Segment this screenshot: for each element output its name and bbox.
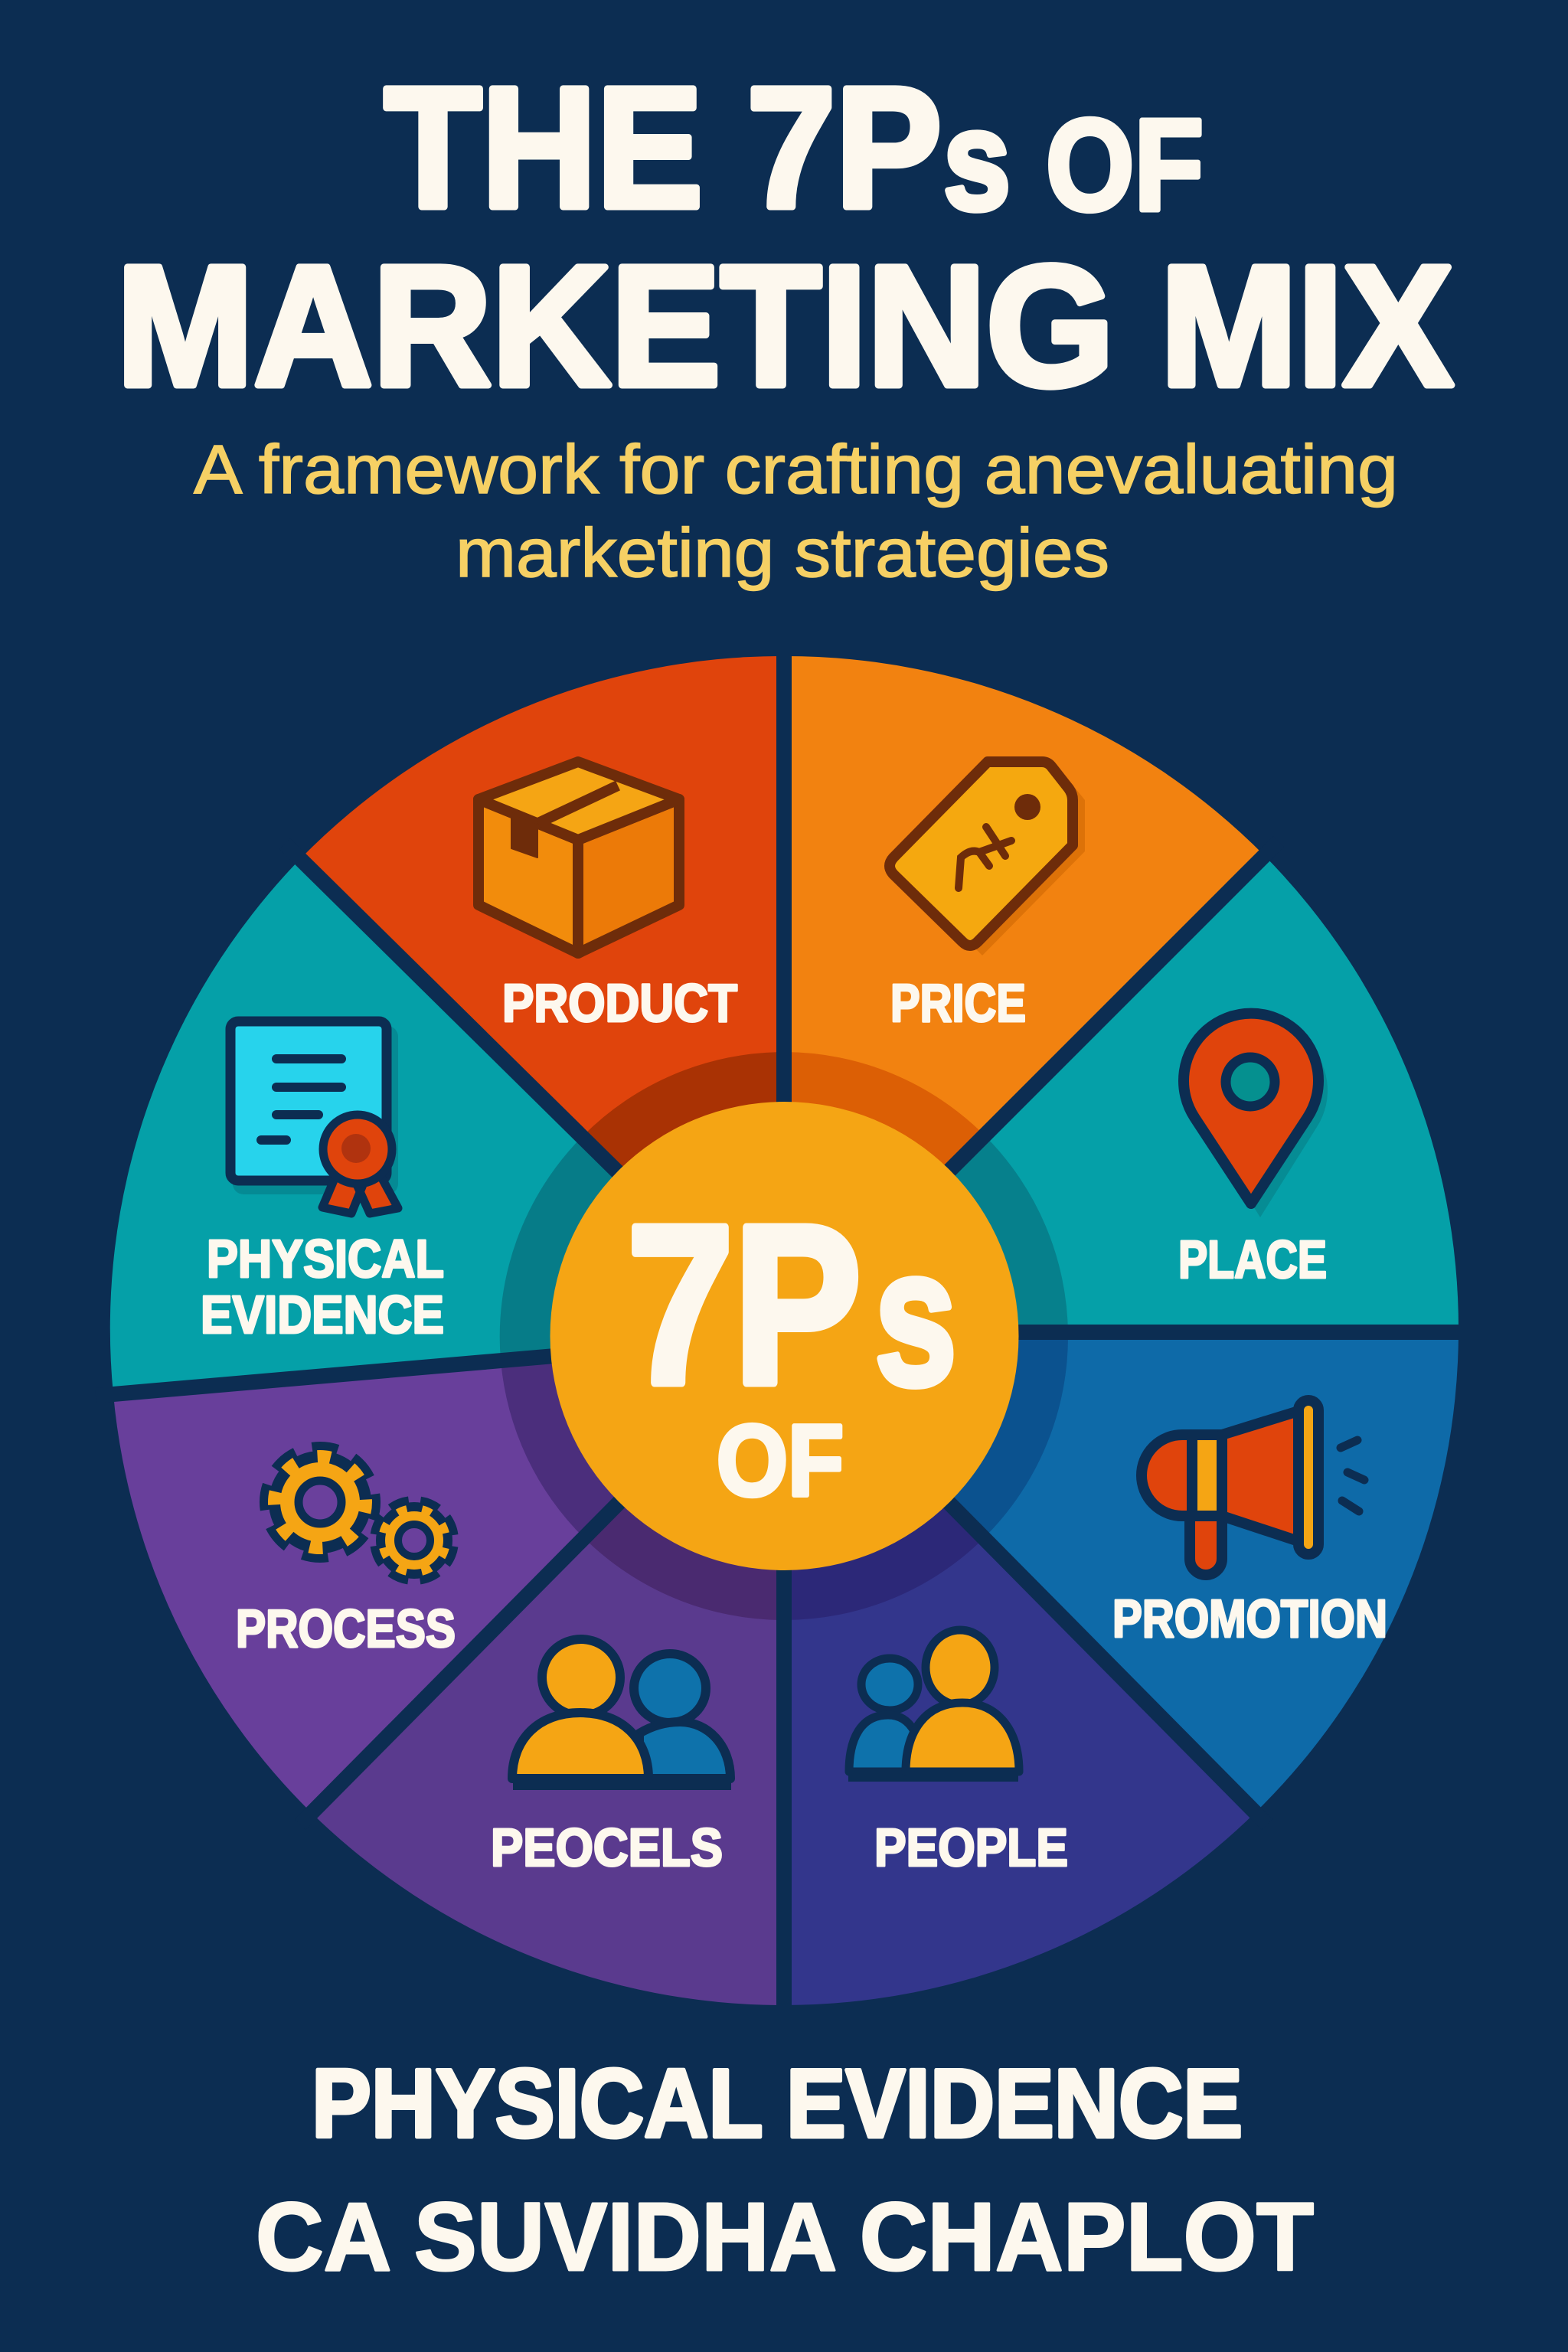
panel: physical evidence xyxy=(110,859,784,1394)
icon: gears xyxy=(264,1446,457,1583)
icon: certificate xyxy=(230,1021,398,1214)
center circle: OF xyxy=(717,1404,844,1517)
label: product: PRODUCT xyxy=(502,973,737,1033)
title: THE 7P xyxy=(384,52,942,243)
label: physical evidence xyxy=(201,1229,444,1344)
label: physical evidence: PHYSICAL xyxy=(207,1229,444,1289)
label: price: PRICE xyxy=(890,973,1026,1033)
icon: people pair right xyxy=(848,1630,1019,1775)
panel: price xyxy=(784,656,1265,1331)
label: process: PROCESS xyxy=(236,1599,456,1658)
footer heading: PHYSICAL EVIDENCE xyxy=(312,2049,1243,2158)
label: physical evidence: EVIDENCE xyxy=(201,1285,444,1344)
panel: people xyxy=(784,1331,1256,2005)
footer author: CA SUVIDHA CHAPLOT xyxy=(256,2183,1314,2291)
center circle: s xyxy=(874,1208,957,1426)
panel: product xyxy=(300,656,784,1331)
title: OF xyxy=(1046,93,1204,238)
subtitle: marketing strategies xyxy=(456,515,1109,592)
panel: promotion xyxy=(784,1331,1459,1812)
subtitle: A framework for crafting anevaluating xyxy=(194,432,1398,508)
icon: megaphone xyxy=(1142,1400,1364,1575)
label: promotion: PROMOTION xyxy=(1112,1589,1387,1648)
center circle xyxy=(550,1102,1018,1570)
subtitle xyxy=(194,432,1398,592)
icon: location pin xyxy=(1184,1014,1328,1217)
inner ring xyxy=(500,1052,1068,1620)
icon: price tag xyxy=(890,762,1085,956)
center circle: 7P xyxy=(627,1178,861,1431)
icon: box xyxy=(479,762,679,953)
title xyxy=(116,52,1453,422)
panel: peocels xyxy=(312,1331,784,2005)
title: s xyxy=(943,82,1011,240)
label: people: PEOPLE xyxy=(874,1818,1068,1877)
wheel chart xyxy=(96,643,1474,2021)
label: place: PLACE xyxy=(1178,1230,1327,1289)
panel: place xyxy=(784,856,1459,1332)
title: MARKETING MIX xyxy=(116,230,1453,422)
panel: process xyxy=(113,1331,784,1813)
label: peocels: PEOCELS xyxy=(491,1818,723,1877)
icon: people pair left xyxy=(512,1639,731,1782)
